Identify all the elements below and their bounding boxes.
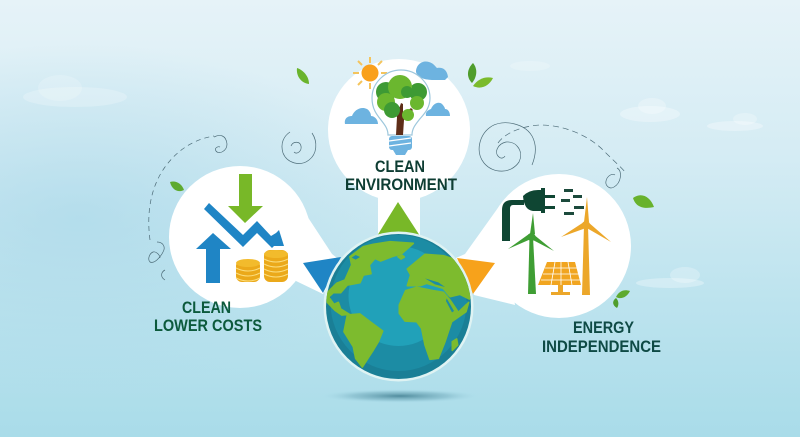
panel: energy independence <box>456 174 631 318</box>
icon: orange wind turbine <box>561 197 611 295</box>
icon: green wind turbine <box>508 213 554 294</box>
heading: energy independence: INDEPENDENCE <box>542 338 661 356</box>
icon: blue up arrow <box>196 233 231 283</box>
panel: clean lower costs <box>169 166 342 308</box>
icon: sun <box>353 57 387 89</box>
icon: clouds <box>345 61 450 124</box>
arrow: green <box>377 202 420 236</box>
panel: clean environment <box>328 57 470 236</box>
leaf: left <box>170 181 184 191</box>
icon: light bulb with tree <box>372 70 430 155</box>
icon: coins <box>236 250 288 282</box>
leaf: top left <box>297 68 309 84</box>
dashed swirl right <box>479 123 625 188</box>
arrow: blue <box>303 257 341 293</box>
icon: blue falling trend arrow <box>204 203 284 248</box>
heading: clean lower costs <box>154 299 262 335</box>
ground shadow <box>320 389 480 403</box>
icon: solar panel <box>538 262 581 295</box>
heading: clean environment <box>345 158 457 194</box>
arrow: orange <box>457 258 495 294</box>
icon: green down arrow <box>228 174 263 223</box>
leaf: right <box>633 195 654 208</box>
leaf: bottom right <box>613 290 630 308</box>
continents <box>327 242 471 367</box>
heading: clean environment: ENVIRONMENT <box>345 176 457 194</box>
leaf: top right <box>468 63 493 88</box>
icon: power plug <box>502 188 555 241</box>
heading: energy independence <box>542 319 661 356</box>
heading: energy independence: ENERGY <box>573 319 634 337</box>
heading: clean environment: CLEAN <box>375 158 425 176</box>
heading: clean lower costs: CLEAN <box>182 299 231 317</box>
icon: motion dashes <box>561 189 584 215</box>
globe <box>324 232 474 382</box>
heading: clean lower costs: LOWER COSTS <box>154 317 262 335</box>
dashed swirl left <box>149 132 316 280</box>
